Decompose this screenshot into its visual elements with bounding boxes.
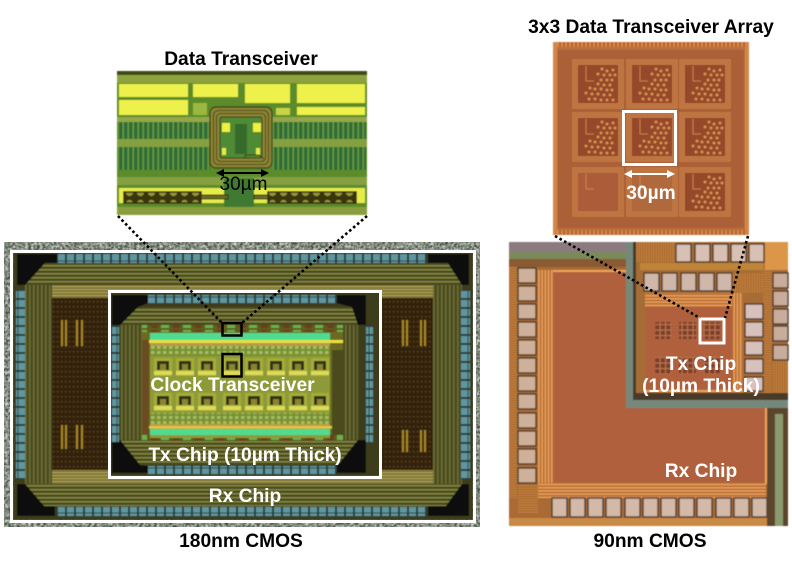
top grey band <box>509 242 626 267</box>
tx right pads <box>745 304 763 391</box>
dimension arrow: 30 um white <box>624 170 675 178</box>
highlight box: selected transceiver <box>624 112 676 164</box>
clock transceiver row 2 <box>154 393 329 411</box>
label: rx chip 90nm: Rx Chip <box>665 461 737 482</box>
rx pads bottom row <box>552 498 767 517</box>
array cell 7 empty <box>573 168 623 216</box>
tx upper pads <box>676 244 764 262</box>
dotted zoom lines: 90nm <box>555 236 748 318</box>
tx chip edge <box>626 242 788 408</box>
array cell 8 empty <box>627 168 677 216</box>
outer outline: rx chip <box>12 252 474 522</box>
photo: 3x3 data transceiver array <box>553 42 749 235</box>
tx chip surface <box>636 242 788 398</box>
photo: 180nm CMOS die <box>4 242 480 527</box>
title: 3x3 data transceiver array: 3x3 Data Transceiver Array <box>528 17 774 38</box>
yellow pad strips <box>119 178 365 213</box>
array cell 2 <box>627 60 677 108</box>
title: data transceiver: Data Transceiver <box>164 49 318 70</box>
label: rx chip: Rx Chip <box>209 486 281 507</box>
tx corners <box>112 295 366 473</box>
tx core <box>142 325 344 440</box>
label: clock transceiver: Clock Transceiver <box>150 375 315 396</box>
caption: 180nm CMOS: 180nm CMOS <box>179 531 303 552</box>
array cell 9 <box>680 168 730 216</box>
array cell 6 <box>680 113 730 161</box>
delay chain left <box>124 192 228 203</box>
highlight box: array <box>700 319 724 343</box>
memory block right <box>381 298 433 470</box>
delay chain right <box>254 192 356 203</box>
label: 10um thick: (10µm Thick) <box>642 376 760 397</box>
dimension arrow: 30 um black <box>216 169 269 177</box>
rx pads left column <box>518 268 536 483</box>
rx chip body <box>13 252 473 520</box>
photo: 90nm CMOS die <box>509 242 788 526</box>
rx pads <box>16 254 470 516</box>
dotted zoom lines: 180nm <box>118 216 367 323</box>
array cell 1 <box>573 60 623 108</box>
right edge of rx <box>767 408 788 526</box>
memory block left <box>52 298 108 470</box>
marker: data transceiver box <box>222 323 242 336</box>
tx pads <box>112 295 373 474</box>
small transceiver arrays lower <box>655 357 720 374</box>
rx chip core <box>554 272 765 482</box>
array cell 4 <box>573 113 623 161</box>
label: 30um data transceiver: 30µm <box>220 174 267 195</box>
label: 30um array: 30µm <box>626 183 676 204</box>
photo: data transceiver close-up <box>117 71 367 215</box>
array cell 3 <box>680 60 730 108</box>
tx chip body <box>110 292 380 476</box>
small transceiver arrays upper <box>655 322 720 339</box>
tx middle pads <box>644 273 732 291</box>
marker: clock transceiver box <box>222 354 242 376</box>
clock transceiver row 1 <box>154 358 329 376</box>
caption: 90nm CMOS: 90nm CMOS <box>593 531 707 552</box>
rx bus stripes <box>538 270 767 498</box>
label: tx chip 10um thick: Tx Chip (10µm Thick) <box>148 445 342 466</box>
rx corner pads <box>17 254 469 516</box>
array cell 5 <box>627 113 677 161</box>
label: tx chip: Tx Chip <box>666 354 736 375</box>
inner outline: tx chip <box>110 292 380 478</box>
icon: inductor coil <box>210 107 272 168</box>
far right pads <box>773 273 788 360</box>
left edge stripes <box>509 258 779 526</box>
